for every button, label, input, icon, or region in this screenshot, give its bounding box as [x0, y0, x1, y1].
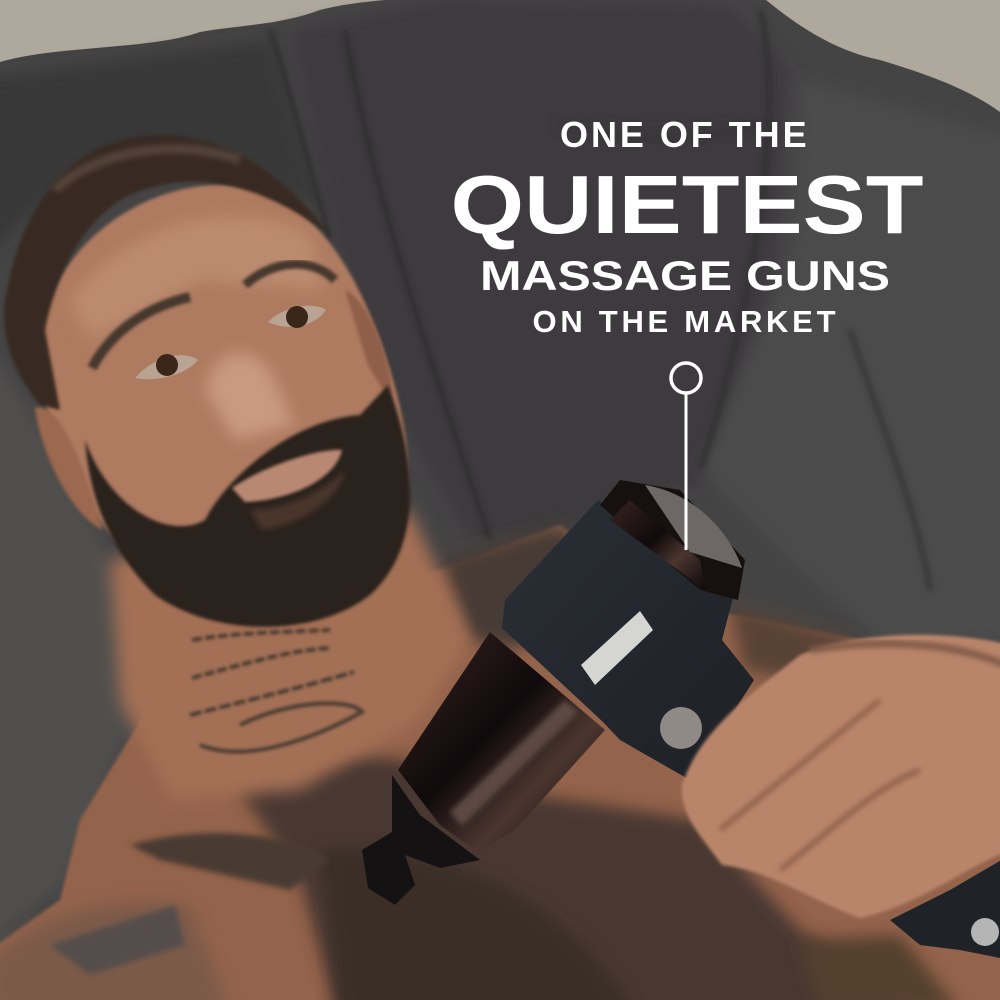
man: hair — [4, 135, 330, 410]
neck tattoo — [190, 630, 362, 752]
hand — [682, 635, 1000, 918]
man: beard — [85, 385, 410, 627]
gun barrel — [398, 632, 605, 852]
massage gun — [362, 480, 1000, 960]
man: torso — [0, 525, 1000, 1000]
heading — [450, 114, 924, 339]
heading line 4: ON THE MARKET — [532, 304, 836, 339]
gun button — [660, 707, 702, 749]
heading line 3: MASSAGE GUNS — [480, 252, 890, 299]
gun tail — [890, 855, 1000, 960]
man: head — [35, 185, 408, 615]
man: eyes and brows — [92, 264, 335, 379]
man: neck — [110, 510, 470, 800]
heading line 2: QUIETEST — [450, 158, 924, 251]
pointer line — [671, 363, 701, 550]
gun label badge — [581, 611, 653, 685]
gun body — [502, 480, 754, 780]
heading line 1: ONE OF THE — [560, 114, 810, 155]
gun attachment head — [362, 775, 480, 905]
